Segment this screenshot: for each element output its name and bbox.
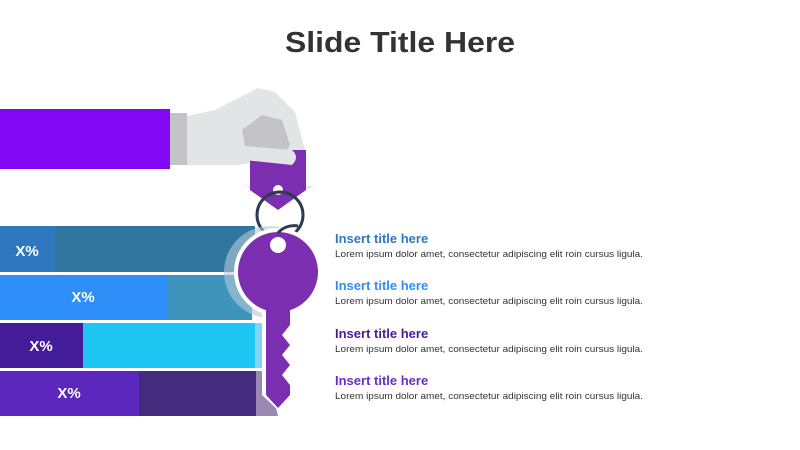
bar 1: X%: [15, 243, 39, 260]
text block 1: Lorem ipsum dolor amet, consectetur adipiscing elit roin cursus ligula.: [335, 249, 643, 260]
text block 3: Lorem ipsum dolor amet, consectetur adipiscing elit roin cursus ligula.: [335, 344, 643, 355]
key: [224, 226, 322, 410]
bar 4: X%: [57, 385, 81, 402]
text block 1: [335, 231, 643, 260]
title: Slide Title Here: [285, 27, 515, 59]
text block 4: Insert title here: [335, 373, 428, 388]
bar 1: [0, 226, 255, 272]
finger over tag: [245, 146, 296, 165]
hand with sleeve: [0, 88, 305, 169]
text block 2: Insert title here: [335, 278, 428, 293]
text block 3: [335, 326, 643, 355]
bar 3: [0, 323, 263, 368]
bar 2: [0, 275, 252, 320]
bar chart: [0, 226, 278, 416]
text block 4: [335, 373, 643, 402]
text block 2: [335, 278, 643, 307]
bar 2: X%: [71, 289, 95, 306]
text block 3: Insert title here: [335, 326, 428, 341]
key ring: [257, 192, 303, 238]
bar 3: X%: [29, 338, 53, 355]
text block 1: Insert title here: [335, 231, 428, 246]
text block 2: Lorem ipsum dolor amet, consectetur adipiscing elit roin cursus ligula.: [335, 296, 643, 307]
bar 4: [0, 371, 278, 416]
key tag: [245, 146, 315, 210]
text block 4: Lorem ipsum dolor amet, consectetur adipiscing elit roin cursus ligula.: [335, 391, 643, 402]
